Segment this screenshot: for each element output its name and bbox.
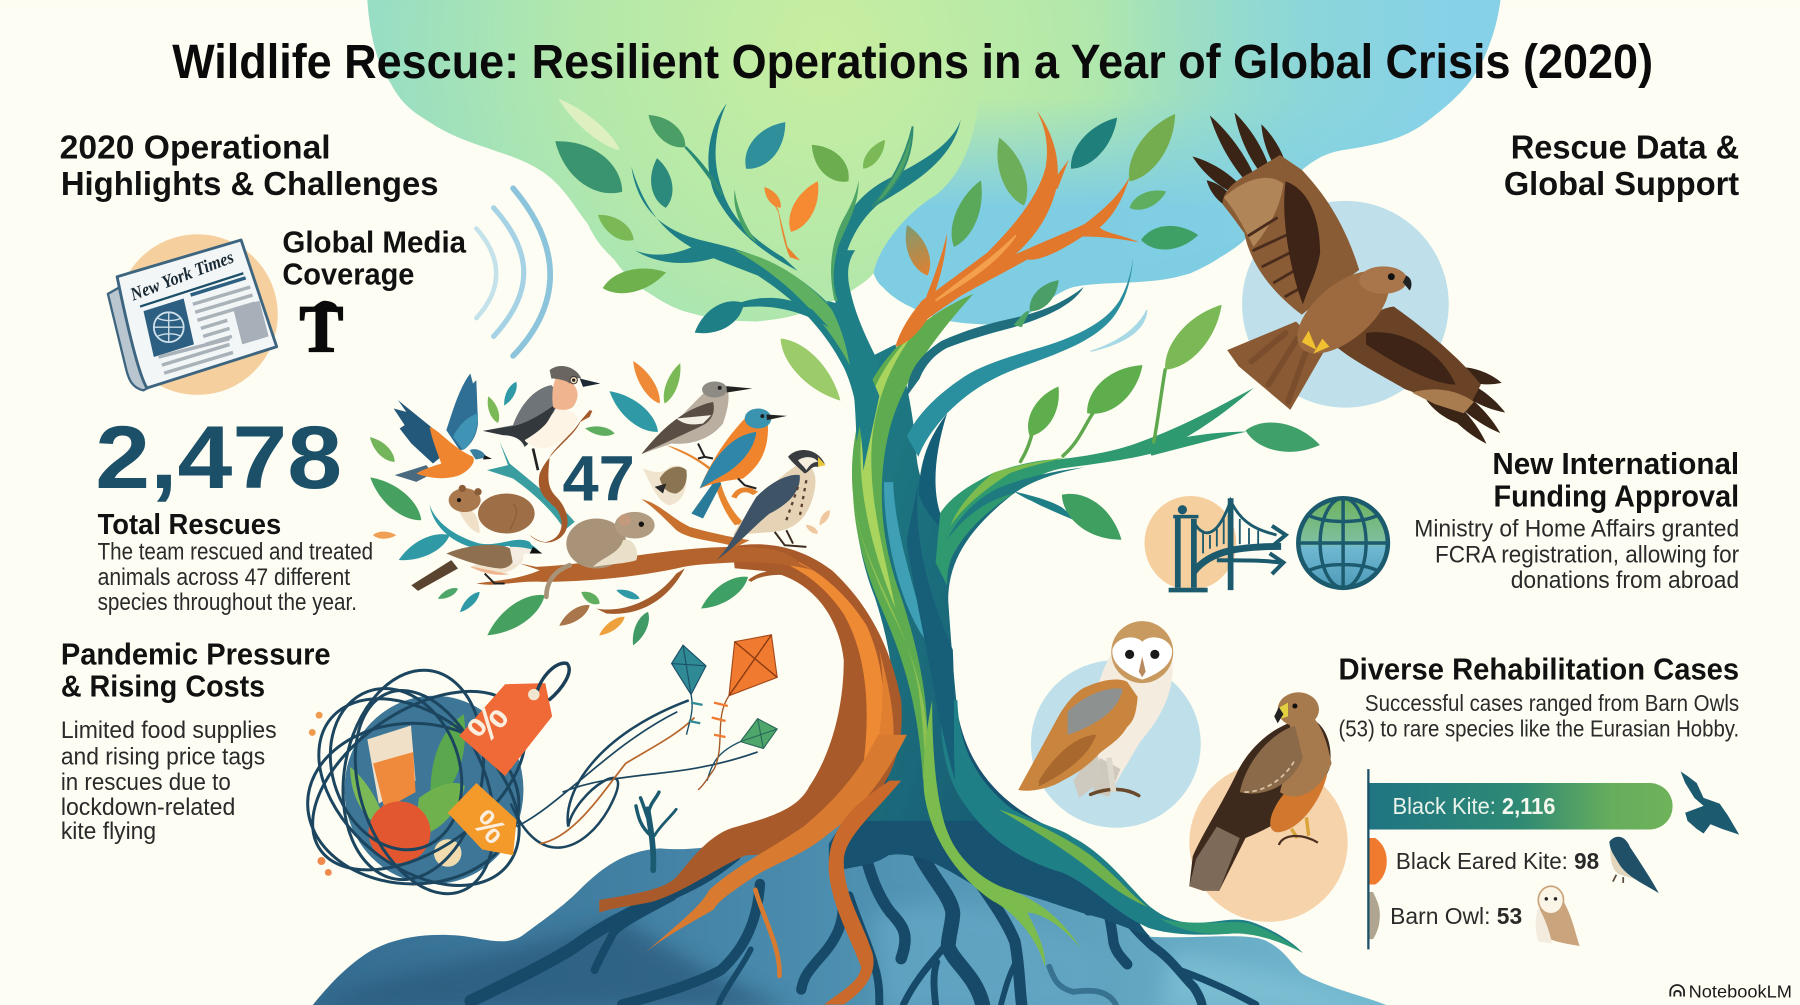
text: pandemic description: in rescues due to [61,769,231,796]
bird: falcon [716,450,826,560]
orange limb and roots [599,544,907,1005]
text: FCRA description [1414,516,1739,594]
text: FCRA description: Ministry of Home Affairs granted [1414,516,1739,543]
heading: global media coverage [282,225,467,292]
heading: rescue data: Global Support [1504,166,1739,203]
heading: pandemic pressure: Pandemic Pressure [61,637,331,672]
text: rehabilitation description [1339,690,1739,741]
bird: small behind number [643,466,687,505]
stat: total rescues: Total Rescues [98,509,281,541]
icon: tangled food and price tags: % [465,803,514,852]
text: pandemic description: Limited food supplies [61,717,277,744]
heading: operational highlights: 2020 Operational [60,129,331,166]
watermark: NotebookLM: NotebookLM [1689,982,1792,1002]
text: pandemic description: lockdown-related [61,794,235,821]
bar chart: rescued species [1368,769,1673,949]
icon: globe [1298,498,1388,588]
title: Wildlife Rescue: Resilient Operations in a Year of Global Crisis (2020) [172,35,1653,89]
bird: grey and peach [483,366,600,470]
stat: total rescues: animals across 47 different [98,564,350,591]
bird: brown on branch [411,540,542,591]
small sapling [636,792,676,870]
heading: operational highlights [60,129,439,203]
icon: small falcon [1609,837,1659,893]
heading: new funding: New International [1492,446,1739,481]
stat: total rescues: 2,478 [95,407,342,507]
text: FCRA description: donations from abroad [1511,567,1739,594]
heading: diverse rehabilitation: Diverse Rehabilitation Cases [1339,652,1739,687]
tree roots [471,855,1256,1005]
animal: brown rodent [449,485,535,534]
bar: barn owl: Barn Owl: 53 [1390,903,1522,929]
heading: rescue data: Rescue Data & [1511,129,1739,166]
bar: barn owl [1368,892,1522,939]
icon: NYT logo: T [300,293,343,366]
icon: bridge [1145,496,1286,590]
lower wing feather tips [1417,363,1509,449]
heading: pandemic pressure: & Rising Costs [61,668,265,703]
heading: global media coverage: Coverage [282,257,414,292]
heading: global media coverage: Global Media [282,225,467,260]
canopy sky blob [367,0,1500,324]
text: rehabilitation description: (53) to rare species like the Eurasian Hobby. [1339,715,1739,741]
bar: black kite: Black Kite: 2,116 [1392,793,1555,819]
text: pandemic description: and rising price tags [61,744,265,771]
icon: tangled food and price tags [281,655,758,923]
upper wing feather tips [1188,109,1294,213]
bar: black kite [1368,783,1673,829]
tree trunk [829,294,1303,967]
text: rehabilitation description: Successful cases ranged from Barn Owls [1365,690,1739,716]
bird: blue and orange flyer [394,374,492,482]
text: pandemic description: kite flying [61,818,156,845]
number: 47 species: 47 [562,443,635,515]
bird: blue and orange perched [691,409,787,519]
stat: total rescues [95,407,373,616]
icon: flying black kite [1188,109,1509,449]
stat: total rescues: species throughout the year. [98,589,357,616]
icon: small owl [1536,886,1580,946]
branches holding the animals [430,410,813,614]
icon: kite silhouette [1681,771,1739,835]
icon: newspaper: New York Times [127,247,236,305]
branch with birds and animals [364,358,832,648]
text: pandemic description [61,717,277,845]
leaves around the animals [364,358,832,648]
tree leaves [545,93,1323,551]
bar: black eared kite [1368,838,1599,885]
heading: rescue data [1504,129,1739,203]
heading: operational highlights: Highlights & Challenges [61,166,439,203]
heading: pandemic pressure [61,637,331,703]
icon: barn owl [1018,621,1201,828]
stat: total rescues: The team rescued and treated [98,539,373,566]
heading: new funding [1492,446,1739,513]
upper branches [631,103,1254,585]
ground hills [312,824,1386,1005]
bird: grey with white wing [641,382,752,459]
icon: kites [672,635,777,790]
icon: tangled food and price tags: % [458,694,517,752]
heading: new funding: Funding Approval [1493,478,1739,513]
icon: broadcast arcs [476,188,550,356]
animal: grey rodent [546,512,655,597]
icon: perched kite [1189,692,1348,922]
icon: newspaper [108,234,278,395]
text: FCRA description: FCRA registration, allowing for [1435,542,1739,569]
bar: black eared kite: Black Eared Kite: 98 [1396,848,1599,874]
